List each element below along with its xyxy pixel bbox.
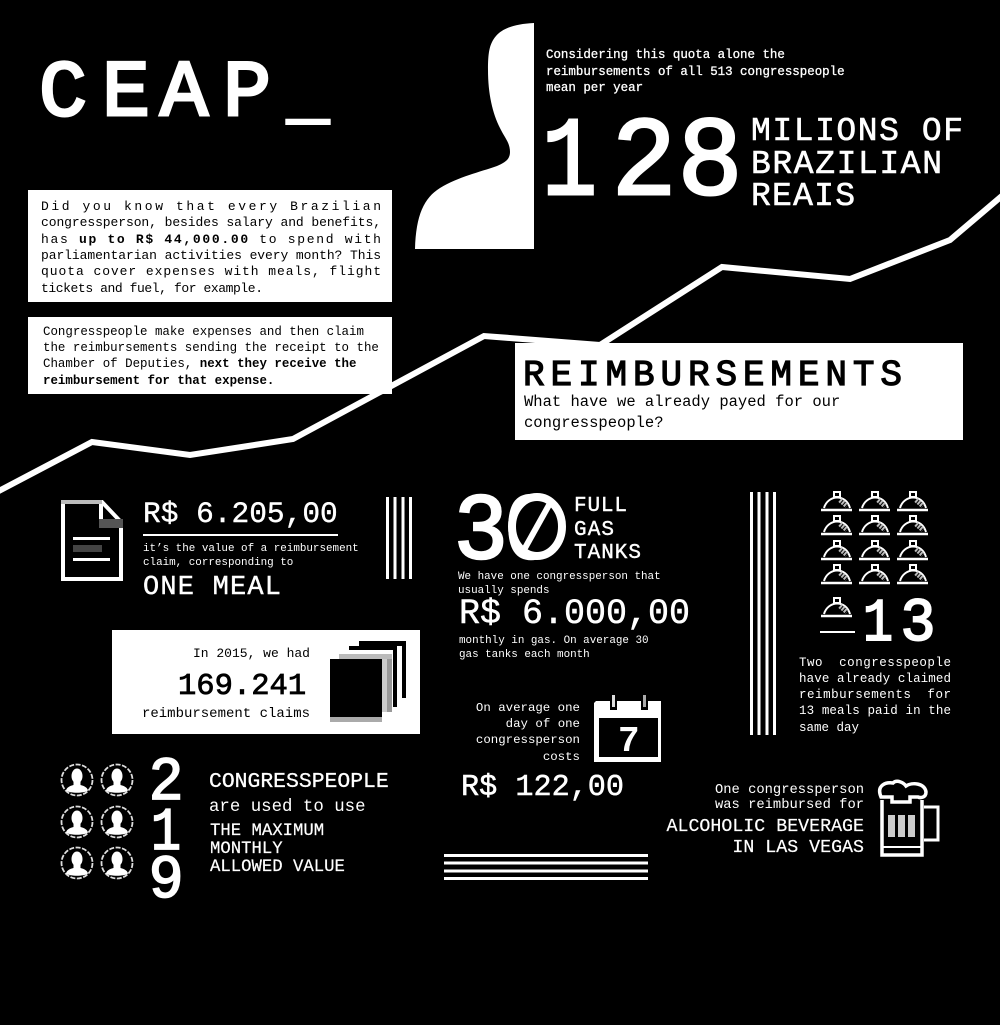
panel: did you know: parliamentarian activities every month? This bbox=[41, 248, 381, 263]
panel: reimbursements heading: REIMBURSEMENTS bbox=[523, 355, 902, 396]
vertical number 219: 9 bbox=[150, 845, 182, 910]
caption: milions of brazilian reais: BRAZILIAN bbox=[751, 146, 942, 183]
text: 13 meals: Two congresspeople bbox=[799, 656, 951, 670]
stat: one meal: claim, corresponding to bbox=[143, 557, 293, 569]
big number 13 bbox=[863, 588, 934, 659]
text: maximum allowed value: CONGRESSPEOPLE bbox=[209, 770, 389, 794]
panel: did you know: congressperson, besides salary and benefits, bbox=[41, 215, 381, 230]
panel: did you know: has up to R$ 44,000.00 to spend with bbox=[41, 232, 381, 247]
text: gas spending: We have one congressperson that bbox=[458, 571, 661, 583]
text: alcoholic beverage: ALCOHOLIC BEVERAGE bbox=[667, 817, 864, 837]
text: 13 meals bbox=[799, 656, 951, 735]
text: alcoholic beverage: One congressperson bbox=[715, 783, 864, 798]
panel: reimbursements heading: congresspeople? bbox=[524, 414, 664, 432]
icon grid: meal cloches bbox=[820, 492, 928, 633]
title: _ bbox=[286, 59, 330, 138]
stat: 30 full gas tanks: FULL bbox=[574, 495, 627, 518]
text: gas spending: R$ 6.000,00 bbox=[459, 594, 690, 634]
stat: 30 full gas tanks: GAS bbox=[574, 519, 614, 542]
text: 13 meals: same day bbox=[799, 721, 860, 735]
text: daily cost: costs bbox=[543, 750, 580, 764]
panel: reimbursement claims: 169.241 bbox=[178, 670, 306, 704]
panel: how reimbursement works: Chamber of Deputies, next they receive the bbox=[43, 357, 356, 371]
stat: one meal: R$ 6.205,00 bbox=[143, 497, 338, 531]
stat: one meal: ONE MEAL bbox=[143, 573, 281, 603]
text: daily cost bbox=[461, 701, 624, 805]
text: 13 meals: 13 meals paid in the bbox=[799, 704, 951, 718]
panel: how reimbursement works: Congresspeople make expenses and then claim bbox=[43, 325, 364, 339]
panel: did you know: Did you know that every Brazilian bbox=[41, 199, 381, 214]
panel: reimbursements heading bbox=[515, 343, 963, 440]
panel: reimbursement claims bbox=[112, 630, 420, 734]
icon grid: congresspeople bbox=[62, 764, 132, 878]
line chart: rising trend bbox=[0, 195, 1000, 492]
stripes bbox=[444, 856, 648, 878]
icon: calendar bbox=[594, 694, 661, 762]
vertical number 219: 2 bbox=[150, 747, 182, 812]
text: daily cost: congressperson bbox=[476, 733, 580, 747]
icon: head silhouette bbox=[415, 23, 534, 249]
annual total intro text bbox=[546, 48, 845, 95]
text: maximum allowed value: THE MAXIMUM bbox=[210, 822, 324, 841]
stat: one meal: it’s the value of a reimbursement bbox=[143, 543, 359, 555]
vertical number 219: 1 bbox=[151, 800, 181, 868]
panel: how reimbursement works: the reimbursements sending the receipt to the bbox=[43, 341, 379, 355]
icon: beer mug bbox=[880, 781, 938, 855]
caption: milions of brazilian reais: REAIS bbox=[751, 178, 855, 215]
text: 13 meals: reimbursements for bbox=[799, 688, 951, 702]
panel: reimbursement claims: In 2015, we had bbox=[193, 646, 310, 661]
stat: 30 full gas tanks: 30 bbox=[456, 478, 556, 578]
panel: reimbursement claims: reimbursement claims bbox=[142, 706, 310, 722]
caption: milions of brazilian reais bbox=[751, 113, 963, 215]
vertical number 219 bbox=[150, 747, 182, 910]
text: daily cost: R$ 122,00 bbox=[461, 771, 624, 805]
annual total intro text: mean per year bbox=[546, 81, 643, 95]
icon: document bbox=[61, 500, 123, 579]
panel: did you know: quota cover expenses with meals, flight bbox=[41, 264, 381, 279]
text: maximum allowed value: ALLOWED VALUE bbox=[210, 858, 345, 877]
text: alcoholic beverage bbox=[667, 783, 864, 858]
big number 128: 28 bbox=[614, 96, 740, 217]
text: maximum allowed value: are used to use bbox=[209, 798, 366, 817]
text: maximum allowed value: MONTHLY bbox=[210, 840, 283, 859]
text: alcoholic beverage: was reimbursed for bbox=[715, 797, 864, 813]
big number 128: 1 bbox=[542, 101, 597, 228]
text: gas spending: monthly in gas. On average 30 bbox=[459, 635, 649, 647]
text: gas spending bbox=[458, 571, 690, 661]
annual total intro text: Considering this quota alone the bbox=[546, 48, 785, 62]
title: CEAP bbox=[39, 49, 271, 140]
stat: one meal bbox=[143, 497, 359, 603]
stripes bbox=[388, 497, 410, 579]
big number 13: 1 bbox=[863, 591, 893, 659]
text: gas spending: gas tanks each month bbox=[459, 649, 590, 661]
panel: how reimbursement works bbox=[28, 317, 392, 394]
text: alcoholic beverage: IN LAS VEGAS bbox=[732, 838, 864, 858]
caption: milions of brazilian reais: MILIONS OF bbox=[751, 113, 963, 150]
annual total intro text: reimbursements of all 513 congresspeople bbox=[546, 65, 845, 79]
panel: reimbursements heading: What have we already payed for our bbox=[524, 393, 840, 411]
text: gas spending: usually spends bbox=[458, 585, 550, 597]
stripes bbox=[752, 492, 774, 735]
stat: 30 full gas tanks: TANKS bbox=[574, 542, 641, 565]
panel: how reimbursement works: reimbursement for that expense. bbox=[43, 374, 274, 388]
text: daily cost: day of one bbox=[506, 717, 580, 731]
panel: did you know bbox=[28, 190, 392, 302]
icon: stacked papers bbox=[330, 641, 406, 722]
icon: calendar: 7 bbox=[618, 721, 640, 762]
text: 13 meals: have already claimed bbox=[799, 672, 951, 686]
big number 13: 3 bbox=[902, 588, 934, 653]
panel: did you know: tickets and fuel, for example. bbox=[41, 281, 263, 296]
big number 128 bbox=[542, 96, 740, 228]
text: maximum allowed value bbox=[209, 770, 389, 877]
text: daily cost: On average one bbox=[476, 701, 580, 715]
stat: 30 full gas tanks bbox=[456, 478, 641, 578]
